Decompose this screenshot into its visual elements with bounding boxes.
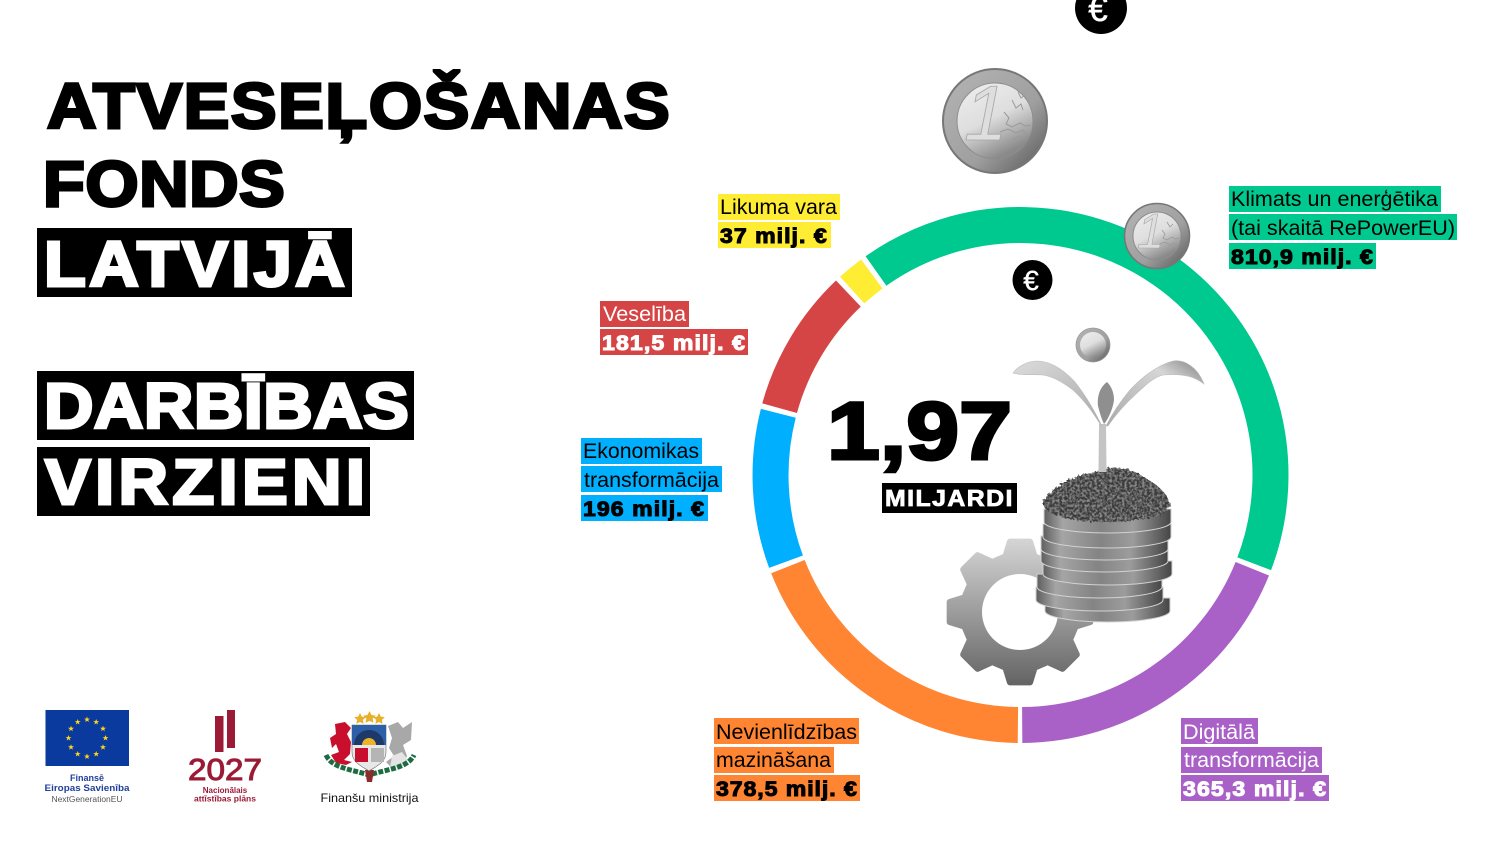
total amount: 1,97	[827, 386, 1012, 477]
icon: euro badge top	[1075, 0, 1127, 34]
title: Atveseļošanas fonds Latvijā: ATVESEĻOŠANAS	[47, 70, 670, 142]
title: Atveseļošanas fonds Latvijā: FONDS	[43, 149, 285, 220]
label: Likuma vara	[718, 194, 840, 248]
label: Klimats un enerģētika	[1229, 186, 1457, 269]
icon: euro badge inside ring: €	[1023, 265, 1039, 296]
icon: euro coin on ring: 1	[1137, 205, 1164, 259]
logo: Finansē Eiropas Savienība	[44, 710, 130, 804]
heading: Darbības virzieni: VIRZIENI	[45, 447, 365, 518]
logo: Finanšu ministrija coat of arms: Finanšu ministrija	[320, 791, 419, 805]
label: Likuma vara: Likuma vara	[720, 196, 837, 219]
label: Klimats un enerģētika: 810,9 milj. €	[1231, 245, 1373, 269]
logo: Nacionālais attīstības plāns 2027: Nacionālais	[203, 786, 248, 795]
icon: euro badge inside ring	[1012, 260, 1052, 300]
label: Nevienlīdzības mazināšana: 378,5 milj. €	[716, 777, 857, 801]
label: Ekonomikas transformācija: 196 milj. €	[583, 497, 704, 521]
label: Digitālā transformācija: 365,3 milj. €	[1183, 777, 1326, 801]
icon: coin stack	[1036, 509, 1172, 622]
icon: small coin above sprout	[1076, 328, 1110, 362]
label: Veselība: 181,5 milj. €	[602, 331, 745, 355]
icon: large euro coin: 1	[964, 69, 1007, 157]
label: Nevienlīdzības mazināšana: mazināšana	[716, 749, 831, 772]
label: Klimats un enerģētika: Klimats un enerģētika	[1231, 188, 1438, 211]
logo: Nacionālais attīstības plāns 2027: 2027	[188, 752, 262, 787]
logo: Finanšu ministrija coat of arms	[320, 711, 419, 805]
donut chart: funding by direction	[771, 225, 1270, 725]
label: Ekonomikas transformācija: transformācija	[584, 469, 719, 492]
logo: Finansē Eiropas Savienība: Finansē	[70, 773, 104, 783]
label: Veselība	[600, 301, 748, 355]
total amount: MILJARDI	[885, 486, 1012, 512]
total amount	[827, 386, 1017, 513]
label: Ekonomikas transformācija	[581, 438, 722, 521]
label: Nevienlīdzības mazināšana	[714, 718, 860, 801]
heading: Darbības virzieni	[37, 371, 414, 518]
label: Digitālā transformācija	[1181, 718, 1329, 801]
label: Veselība: Veselība	[603, 303, 686, 326]
label: Likuma vara: 37 milj. €	[720, 224, 827, 248]
logo: Nacionālais attīstības plāns 2027	[188, 710, 262, 804]
logo: Nacionālais attīstības plāns 2027: attīstības plāns	[194, 794, 257, 804]
heading: Darbības virzieni: DARBĪBAS	[44, 371, 409, 442]
icon: soil mound	[1043, 467, 1170, 522]
title: Atveseļošanas fonds Latvijā: LATVIJĀ	[44, 229, 345, 300]
label: Digitālā transformācija: Digitālā	[1183, 721, 1255, 744]
label: Nevienlīdzības mazināšana: Nevienlīdzības	[716, 721, 857, 744]
label: Ekonomikas transformācija: Ekonomikas	[583, 440, 699, 463]
label: Digitālā transformācija: transformācija	[1184, 749, 1319, 772]
label: Klimats un enerģētika: (tai skaitā RePowerEU)	[1231, 217, 1455, 240]
icon: gear	[950, 542, 1090, 682]
icon: euro coin on ring	[1124, 204, 1190, 268]
icon: sprout	[1013, 361, 1204, 472]
title: Atveseļošanas fonds Latvijā	[37, 70, 670, 300]
icon: large euro coin	[943, 69, 1047, 173]
logo: Finansē Eiropas Savienība: Eiropas Savienība	[44, 783, 130, 794]
logo: Finansē Eiropas Savienība: NextGenerationEU	[52, 795, 123, 804]
